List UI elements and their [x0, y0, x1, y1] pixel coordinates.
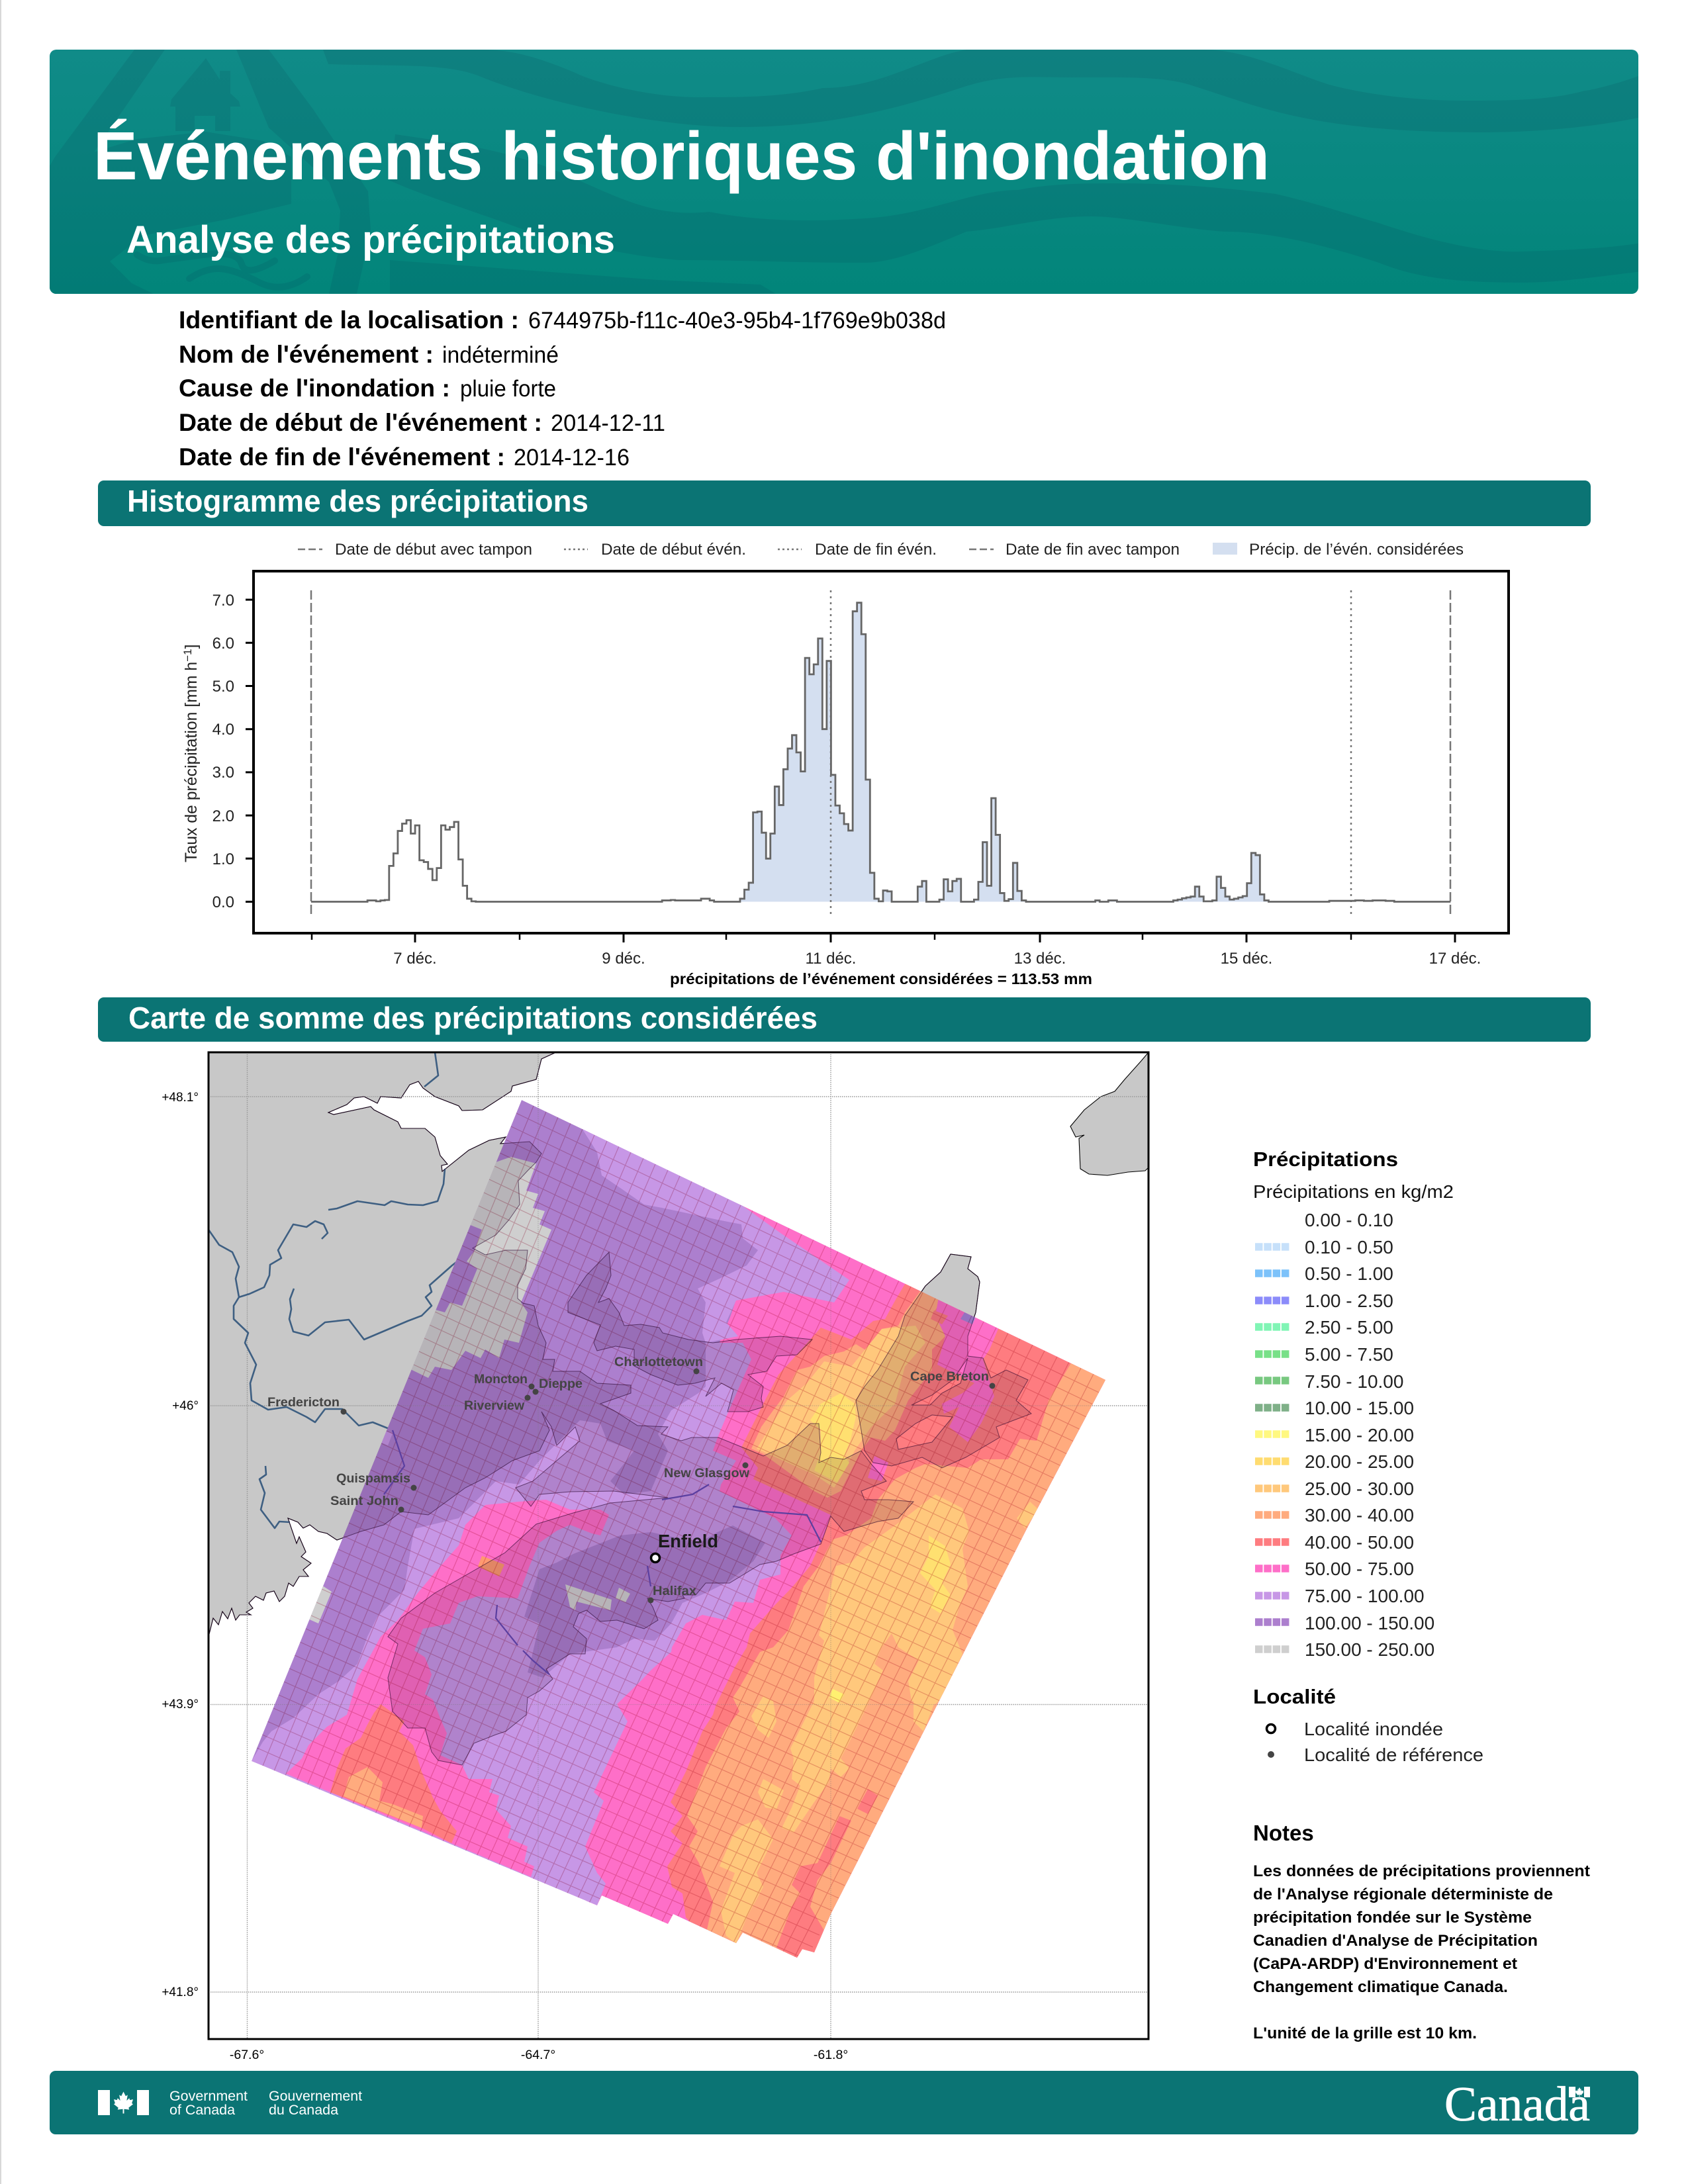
legend: precipitation classes: 150.00 - 250.00: [1305, 1639, 1434, 1660]
reference localities: [340, 1369, 996, 1603]
legend: precipitation classes: 25.00 - 30.00: [1305, 1479, 1414, 1499]
latitude labels: [162, 1091, 199, 1999]
canada wordmark: Canada: [1444, 2077, 1590, 2132]
grid lines: [257, 1106, 1099, 1992]
legend: precipitation classes: 0.00 - 0.10: [1305, 1210, 1393, 1230]
text block: notes: L'unité de la grille est 10 km.: [1253, 2025, 1477, 2042]
section heading: histogram: Histogramme des précipitations: [127, 484, 588, 518]
chart legend: Date de fin avec tampon: [1006, 541, 1180, 559]
legend: locality: Localité: [1253, 1685, 1336, 1708]
icon: canadian flag: [98, 2090, 149, 2115]
latitude labels: +46°: [172, 1399, 199, 1413]
text block: event information: Identifiant de la localisation :: [179, 306, 519, 334]
place labels: Charlottetown: [614, 1355, 703, 1369]
class 20-25 north: [810, 1393, 856, 1482]
x axis labels: 13 déc.: [1014, 950, 1066, 968]
legend: locality: Localité de référence: [1304, 1745, 1483, 1765]
y axis title: Taux de précipitation [mm h: [183, 662, 201, 862]
legend: precipitation classes: 2.50 - 5.00: [1305, 1317, 1393, 1338]
government wordmark: du Canada: [269, 2102, 338, 2118]
class 25-30 north: [757, 1326, 925, 1488]
y axis labels: 3.0: [212, 764, 234, 782]
y axis labels: [212, 592, 234, 911]
legend: precipitation classes: 30.00 - 40.00: [1305, 1505, 1414, 1525]
class 30-40 isolated cells: [478, 1556, 504, 1576]
place labels: Riverview: [464, 1399, 524, 1413]
legend: precipitation classes: 1.00 - 2.50: [1305, 1291, 1393, 1311]
y axis labels: 2.0: [212, 807, 234, 825]
precipitation step line: [311, 603, 1450, 901]
total precipitation note: précipitations de l’événement considérées = 113.53 mm: [670, 970, 1092, 987]
longitude labels: [230, 2048, 848, 2062]
class 30-40 south east: [687, 1362, 1105, 1979]
place labels: Moncton: [474, 1373, 528, 1387]
class 50-75 east: [576, 1194, 1105, 1979]
bar chart: precipitation histogram: [181, 571, 1509, 987]
class 100-150 base: [252, 1100, 1105, 1979]
chart legend: Date de début avec tampon: [335, 541, 532, 559]
class 75-100 north: [582, 1128, 849, 1343]
axes frame: [254, 571, 1509, 933]
legend: precipitation classes: 15.00 - 20.00: [1305, 1425, 1414, 1445]
place labels: Halifax: [653, 1584, 696, 1598]
government wordmark: Gouvernement: [269, 2088, 362, 2104]
y axis labels: 7.0: [212, 592, 234, 610]
legend: precipitation classes: 5.00 - 7.50: [1305, 1344, 1393, 1365]
x axis labels: 9 déc.: [602, 950, 645, 968]
text block: event information: Cause de l'inondation :: [179, 375, 450, 402]
flooded locality: Enfield: Enfield: [658, 1531, 718, 1551]
class 75-100 central and south: [252, 1343, 792, 1905]
chart legend: Précip. de l’évén. considérées: [1249, 541, 1464, 559]
class 50-75 Cape Breton: [935, 1297, 1000, 1442]
class 40-50 south east patches: [776, 1789, 878, 1958]
longitude labels: -67.6°: [230, 2048, 264, 2062]
rivers: [209, 1052, 474, 1528]
text block: notes: Les données de précipitations proviennent: [1253, 1862, 1590, 1880]
title: Événements historiques d'inondation: [93, 118, 1270, 194]
legend: precipitation classes: Précipitations en kg/m2: [1253, 1181, 1454, 1202]
rivers over grid: [384, 1430, 821, 1674]
place labels: Cape Breton: [910, 1370, 989, 1384]
x axis labels: 17 déc.: [1429, 950, 1481, 968]
text block: event information: 2014-12-11: [551, 410, 665, 436]
legend: precipitation classes: Précipitations: [1253, 1148, 1398, 1171]
latitude labels: +43.9°: [162, 1698, 199, 1711]
longitude labels: -61.8°: [814, 2048, 848, 2062]
class 50-75 south west: [286, 1500, 609, 1877]
subtitle: Analyse des précipitations: [126, 218, 615, 261]
legend: precipitation classes: [1253, 1148, 1454, 1660]
legend: precipitation classes: 20.00 - 25.00: [1305, 1451, 1414, 1472]
legend: precipitation classes: 40.00 - 50.00: [1305, 1532, 1414, 1553]
class 25-30 south east: [720, 1494, 1039, 1944]
axis ticks: [246, 600, 1455, 942]
filled event precipitation: [740, 603, 1268, 901]
legend: precipitation classes: 75.00 - 100.00: [1305, 1586, 1425, 1606]
legend: precipitation classes: 0.50 - 1.00: [1305, 1263, 1393, 1284]
icon: flood house logo: [50, 50, 371, 294]
text block: notes: de l'Analyse régionale déterministe de: [1253, 1886, 1553, 1903]
y axis labels: 5.0: [212, 678, 234, 696]
place labels: Dieppe: [539, 1377, 583, 1391]
place labels: [267, 1355, 989, 1598]
footer band: [50, 2071, 1638, 2134]
legend: precipitation classes: 100.00 - 150.00: [1305, 1613, 1434, 1633]
legend: locality: [1253, 1685, 1483, 1765]
legend: locality: Localité inondée: [1304, 1719, 1443, 1739]
section heading: map: [98, 997, 1591, 1042]
y axis labels: 6.0: [212, 635, 234, 653]
text block: event information: [179, 306, 946, 471]
text block: notes: [1253, 1821, 1590, 2042]
text block: event information: Date de fin de l'événement :: [179, 443, 505, 471]
latitude labels: +48.1°: [162, 1091, 199, 1105]
government wordmark: Government: [169, 2088, 248, 2104]
map frame: [209, 1052, 1149, 2039]
place labels: Fredericton: [267, 1396, 340, 1410]
small class 75-100 cell: [377, 1430, 393, 1445]
text block: event information: 6744975b-f11c-40e3-95b4-1f769e9b038d: [528, 308, 946, 334]
government wordmark: of Canada: [169, 2102, 235, 2118]
y axis labels: 1.0: [212, 850, 234, 868]
text block: notes: Notes: [1253, 1821, 1314, 1845]
longitude labels: -64.7°: [521, 2048, 555, 2062]
legend: precipitation classes: 50.00 - 75.00: [1305, 1559, 1414, 1579]
legend: precipitation classes: 10.00 - 15.00: [1305, 1398, 1414, 1418]
y axis title: ]: [183, 645, 201, 649]
reference date lines: [311, 590, 1450, 917]
flooded locality: Enfield: [651, 1531, 718, 1562]
class 30-40 south west: [344, 1767, 423, 1828]
text block: event information: Nom de l'événement :: [179, 341, 434, 368]
class 150-250 north west: [408, 1157, 551, 1378]
text block: notes: précipitation fondée sur le Système: [1253, 1909, 1532, 1927]
y axis labels: 4.0: [212, 721, 234, 739]
chart legend: [298, 541, 1464, 559]
class 100-150 Nova Scotia: [524, 1525, 765, 1678]
newfoundland land: [1070, 1052, 1149, 1175]
text block: event information: indéterminé: [442, 342, 559, 368]
class 40-50 south west: [330, 1704, 457, 1843]
land base: [209, 1054, 980, 1634]
chart legend: Date de début évén.: [601, 541, 746, 559]
x axis labels: [393, 950, 1481, 968]
panel: header banner: [50, 50, 1642, 294]
class 40-50 east: [667, 1279, 1105, 1979]
x axis labels: 11 déc.: [806, 950, 856, 968]
y axis title: −1: [181, 649, 194, 662]
precipitation grid: [252, 1100, 1105, 1979]
text block: notes: Changement climatique Canada.: [1253, 1978, 1508, 1996]
legend: precipitation classes: 7.50 - 10.00: [1305, 1371, 1403, 1392]
x axis labels: 15 déc.: [1221, 950, 1272, 968]
text block: event information: pluie forte: [460, 376, 556, 402]
text block: event information: Date de début de l'événement :: [179, 409, 542, 436]
latitude labels: +41.8°: [162, 1985, 199, 1999]
graticule over grid: [209, 1052, 1149, 2039]
map: precipitation sum: [162, 1052, 1149, 2062]
section heading: histogram: [98, 480, 1591, 526]
text block: notes: (CaPA-ARDP) d'Environnement et: [1253, 1955, 1517, 1973]
section heading: map: Carte de somme des précipitations considérées: [128, 1001, 818, 1035]
government wordmark: [169, 2088, 362, 2118]
place labels: Saint John: [330, 1494, 399, 1508]
chart legend: Date de fin évén.: [815, 541, 937, 559]
text block: event information: 2014-12-16: [514, 445, 630, 471]
text block: notes: Canadien d'Analyse de Précipitation: [1253, 1932, 1538, 1950]
x axis labels: 7 déc.: [393, 950, 437, 968]
class 20-25 south east: [920, 1535, 951, 1614]
place labels: New Glasgow: [664, 1467, 749, 1480]
map graticule: [209, 1052, 1149, 2039]
place labels: Quispamsis: [336, 1472, 410, 1486]
class 150-250 Nova Scotia cells: [565, 1584, 612, 1610]
legend: precipitation classes: 0.10 - 0.50: [1305, 1237, 1393, 1257]
y axis labels: 0.0: [212, 893, 234, 911]
class 30-40 north: [751, 1289, 949, 1498]
land shading over grid: [209, 1052, 1031, 1765]
